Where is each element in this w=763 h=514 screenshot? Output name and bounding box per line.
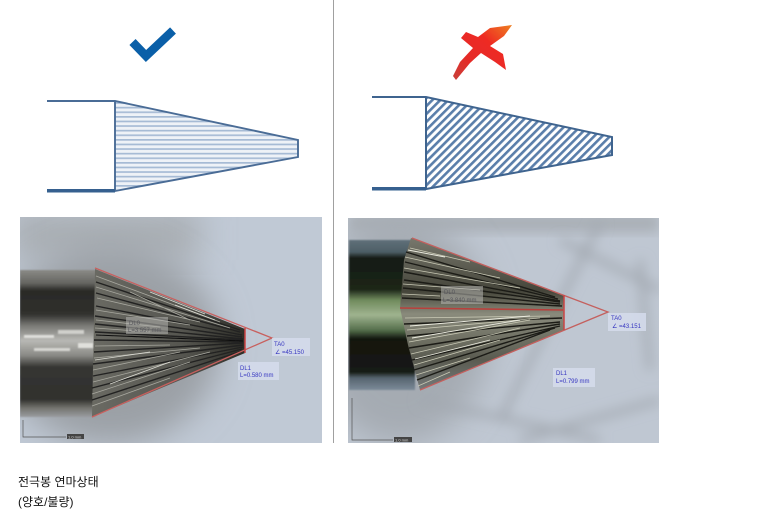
- icon: red brush X mark: [453, 25, 512, 80]
- caption text: (양호/불량): [18, 495, 74, 509]
- caption text: [18, 475, 99, 509]
- label TA0: TA0: [611, 316, 622, 322]
- mottled highlight on shank: [24, 330, 93, 351]
- label TA0: ∠ =43.151: [612, 323, 642, 330]
- label DL0: DL0: [129, 321, 141, 327]
- label TA0: TA0: [274, 342, 285, 348]
- photo: good electrode tip micrograph: [0, 210, 322, 445]
- label DL1: L=0.580 mm: [240, 373, 274, 379]
- scale bar: [352, 398, 412, 442]
- label TA0: [608, 313, 646, 331]
- red measurement lines: [92, 268, 272, 417]
- label DL0: [441, 286, 483, 304]
- cone: [92, 269, 245, 417]
- label DL1: L=0.799 mm: [556, 379, 590, 385]
- label DL1: [238, 362, 279, 380]
- label DL0: [126, 317, 168, 334]
- photo: bad electrode tip micrograph: [348, 218, 659, 443]
- diagram: bad electrode with diagonal grinding: [372, 97, 612, 190]
- red measurement lines: [400, 238, 608, 390]
- label DL1: DL1: [240, 366, 252, 372]
- diagram: good electrode with lengthwise grinding: [47, 101, 298, 192]
- divider between good and bad columns: [333, 0, 334, 443]
- icon: blue check mark: [132, 30, 173, 56]
- scale bar: [23, 420, 84, 440]
- label DL0: DL0: [444, 290, 456, 296]
- scale bar: 1.0 mm: [68, 434, 82, 440]
- label DL0: L=3.557 mm: [128, 328, 162, 334]
- cone: [400, 238, 564, 390]
- scale bar: 1.0 mm: [395, 438, 409, 442]
- label DL1: [553, 368, 595, 387]
- label DL1: DL1: [556, 371, 568, 377]
- label TA0: ∠ =45.150: [275, 349, 305, 356]
- caption text: 전극봉 연마상태: [18, 475, 99, 489]
- label DL0: L=3.840 mm: [443, 298, 477, 304]
- label TA0: [272, 338, 310, 356]
